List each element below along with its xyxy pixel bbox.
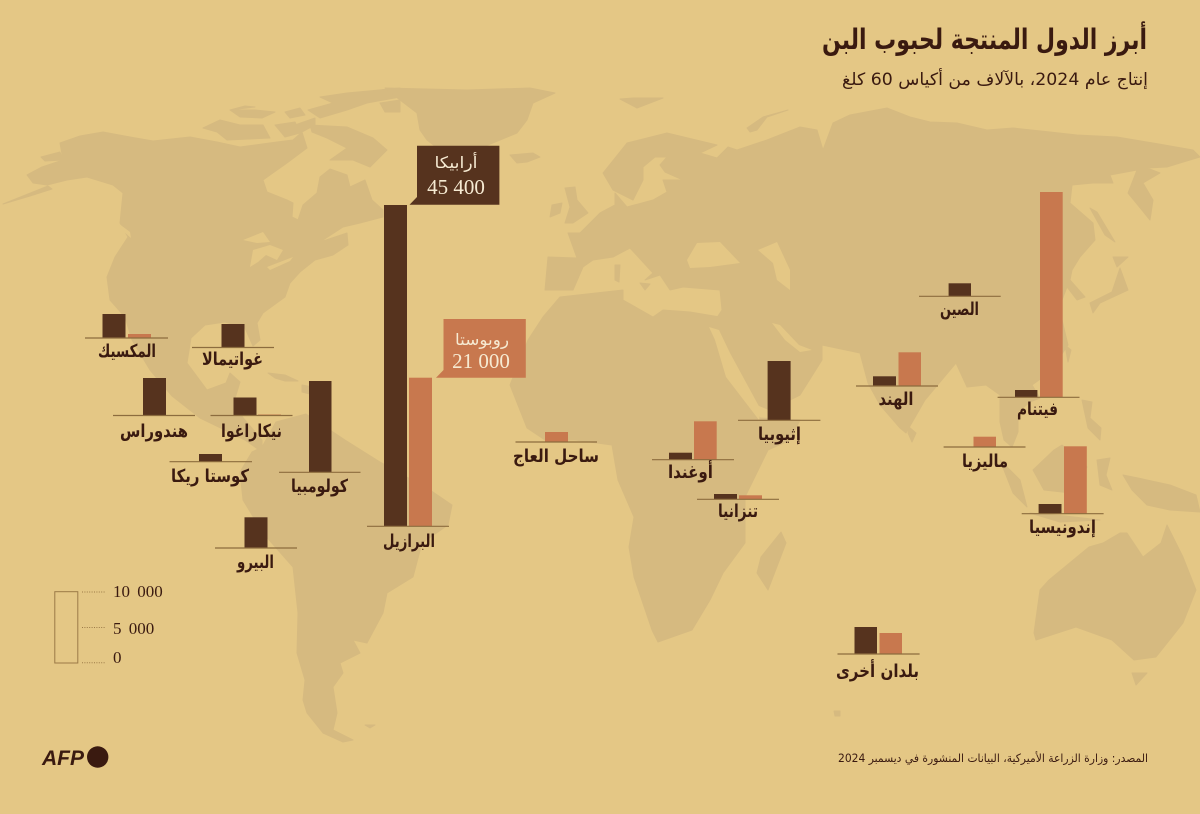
scale legend: 10 000 [113, 582, 163, 601]
bars: Colombia [279, 381, 360, 497]
scale legend: 5 000 [113, 619, 154, 638]
AFP logo: AFP [41, 747, 85, 770]
bars: China: الصين [940, 299, 979, 320]
bars: Indonesia [1022, 446, 1104, 538]
bars: Malaysia [944, 437, 1026, 472]
seas and lakes [111, 205, 812, 420]
bars: Indonesia: إندونيسيا [1029, 517, 1096, 538]
callout: robusta [436, 319, 526, 378]
bars: Vietnam: فيتنام [1017, 399, 1058, 420]
bars: Tanzania: تنزانيا [718, 501, 758, 522]
bars: Brazil: البرازيل [383, 531, 435, 552]
bars: other countries: بلدان أخرى [836, 659, 919, 682]
bars: Mexico: المكسيك [98, 341, 156, 362]
bars: Ivory Coast [513, 432, 599, 467]
scale legend [55, 582, 163, 667]
subtitle: إنتاج عام 2024، بالآلاف من أكياس 60 كلغ [842, 68, 1148, 90]
AFP logo [41, 746, 108, 770]
bars: Honduras [113, 378, 195, 442]
bars: Vietnam [998, 192, 1080, 420]
bars: Guatemala: غواتيمالا [202, 349, 263, 370]
bars: Mexico [85, 314, 168, 362]
bars: Peru: البيرو [236, 552, 274, 573]
callout: arabica: 45 400 [427, 175, 485, 199]
source: المصدر: وزارة الزراعة الأميركية، البيانات المنشورة في ديسمبر 2024 [838, 751, 1148, 766]
bars: Ethiopia: إثيوبيا [758, 424, 801, 445]
callout: arabica [410, 146, 499, 205]
bars: Uganda: أوغندا [668, 460, 713, 483]
bars: Guatemala [192, 324, 274, 370]
bars: India [856, 352, 938, 410]
bars: Honduras: هندوراس [120, 421, 188, 442]
bars: Ivory Coast: ساحل العاج [513, 446, 599, 467]
bars: Peru [215, 517, 297, 573]
bars: China [919, 283, 1001, 320]
bars: Nicaragua [210, 398, 292, 442]
bars: Malaysia: ماليزيا [962, 451, 1008, 472]
bars: Ethiopia [738, 361, 820, 445]
callout: arabica: أرابيكا [434, 152, 478, 173]
callout: robusta: روبوستا [455, 330, 509, 350]
bars: India: الهند [878, 389, 914, 410]
scale legend: 0 [113, 648, 122, 667]
bars: Nicaragua: نيكاراغوا [221, 421, 282, 442]
bars: Costa Rica: كوستا ريكا [171, 466, 249, 487]
bars: Costa Rica [170, 454, 252, 487]
bars: Colombia: كولومبيا [291, 476, 348, 497]
callout: robusta: 21 000 [452, 349, 510, 373]
bars: Uganda [652, 421, 734, 483]
bars: Tanzania [697, 494, 779, 522]
bars: Brazil [367, 205, 449, 552]
bars: other countries [836, 627, 920, 682]
